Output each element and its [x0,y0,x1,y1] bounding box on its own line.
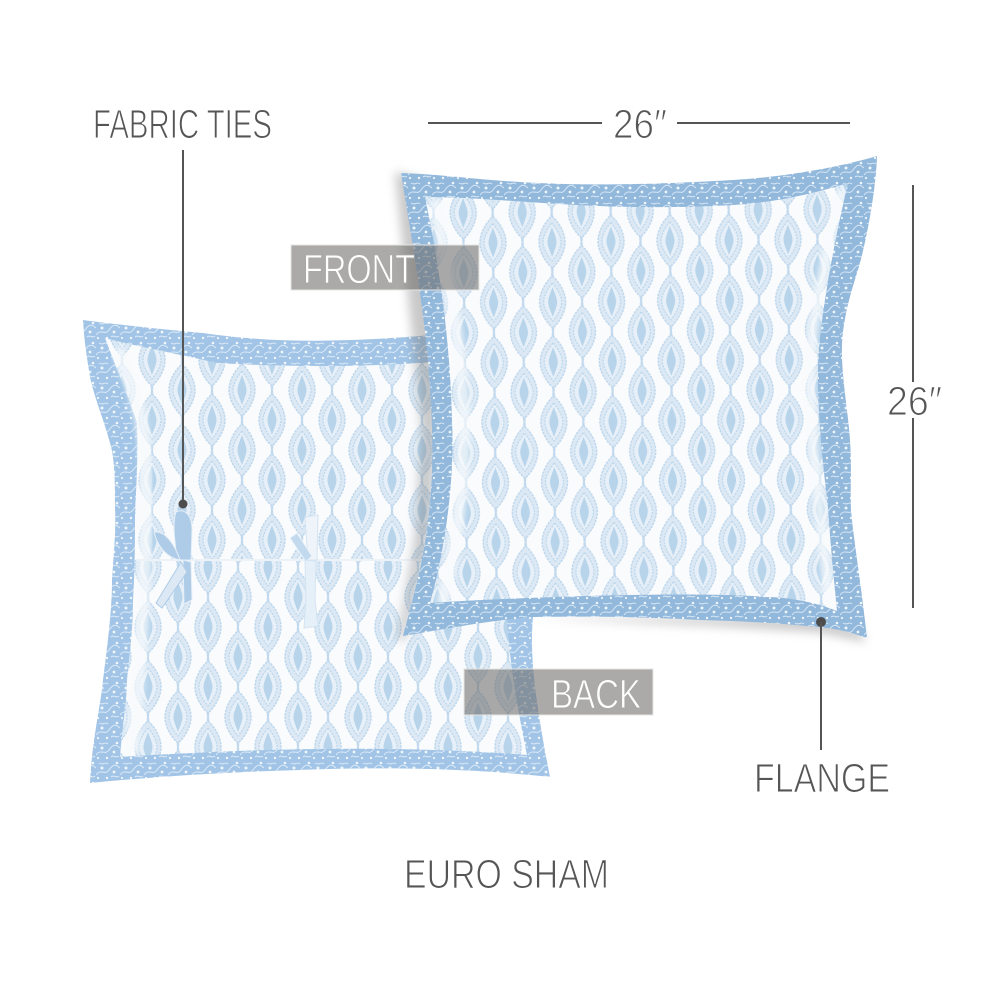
label: BACK: BACK [551,671,641,717]
back pillow side fold [117,350,146,752]
callout: flange [754,617,890,801]
dimension: height 26 inches: 26″ [887,378,942,424]
front pillow flange [401,156,877,638]
label: BACK [464,669,653,717]
pillow: front view [395,156,877,642]
back pillow upper panel [105,338,432,560]
caption: euro sham: EURO SHAM [404,851,609,897]
front pillow side folds [436,190,842,606]
dimension: width 26 inches: 26″ [613,101,667,147]
label: FRONT: FRONT [303,246,415,292]
back opening seam [136,559,430,561]
dimension: height 26 inches [884,185,944,608]
front pillow shadow [395,172,866,642]
callout: flange: FLANGE [754,755,890,801]
callout: fabric ties: FABRIC TIES [93,101,272,147]
fabric tie: right [290,515,318,628]
callout: fabric ties [93,101,272,508]
back pillow flange [83,320,550,783]
back pillow lower panel [120,560,527,757]
fabric tie: left [154,511,192,608]
pillow: back view [83,320,550,783]
front pillow panel [425,183,848,611]
